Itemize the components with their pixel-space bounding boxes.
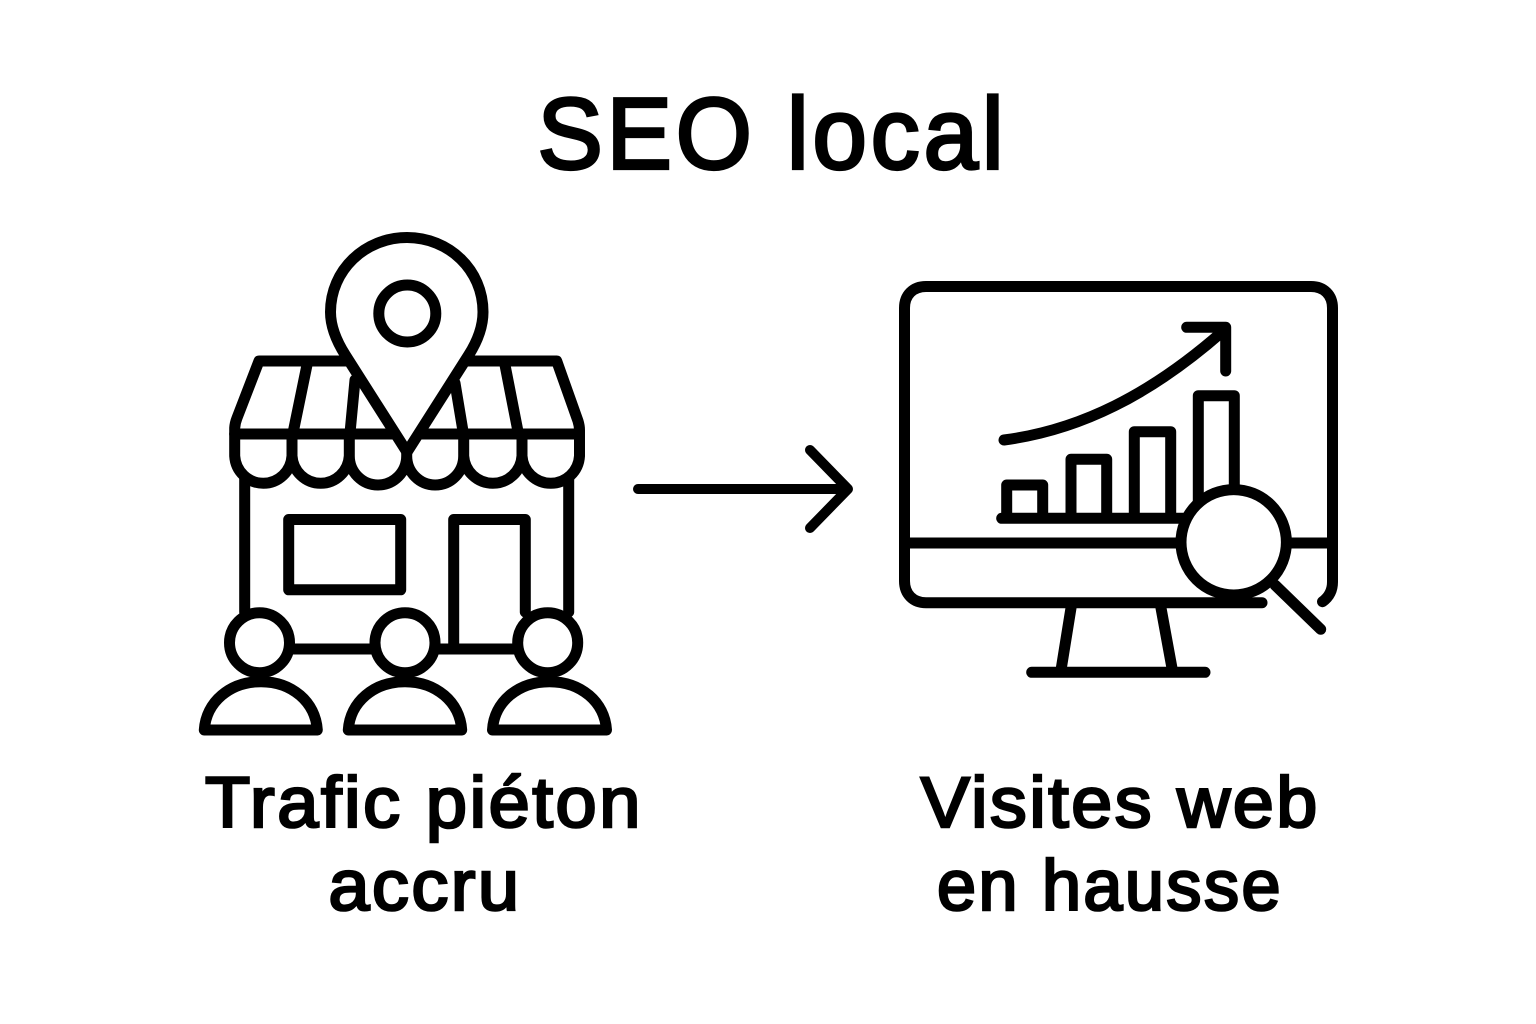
label: web visits xyxy=(921,764,1320,926)
person 2 xyxy=(348,613,462,730)
label: foot traffic: Trafic piéton xyxy=(205,764,643,843)
bar chart xyxy=(1002,396,1234,518)
screen baseline xyxy=(905,538,1332,548)
title: SEO local xyxy=(538,79,1008,191)
awning xyxy=(235,361,579,434)
person 1 xyxy=(204,613,317,730)
icon: storefront with location pin and people xyxy=(204,238,607,730)
label: foot traffic xyxy=(205,764,643,926)
monitor frame xyxy=(904,286,1332,603)
location pin xyxy=(330,238,483,452)
arrow xyxy=(638,450,848,528)
pin centre xyxy=(379,285,436,342)
icon: monitor with growth chart and magnifier xyxy=(904,286,1332,672)
awning scallops xyxy=(235,434,579,485)
monitor stand xyxy=(1032,608,1205,672)
person 3 xyxy=(492,613,606,730)
shop door xyxy=(454,520,525,649)
shop building xyxy=(245,478,569,649)
label: web visits: Visites web xyxy=(921,764,1320,843)
magnifier xyxy=(1181,490,1321,629)
label: web visits: en hausse xyxy=(937,847,1283,926)
growth arrow xyxy=(1004,327,1226,440)
shop window xyxy=(289,520,401,590)
label: foot traffic: accru xyxy=(328,847,522,926)
